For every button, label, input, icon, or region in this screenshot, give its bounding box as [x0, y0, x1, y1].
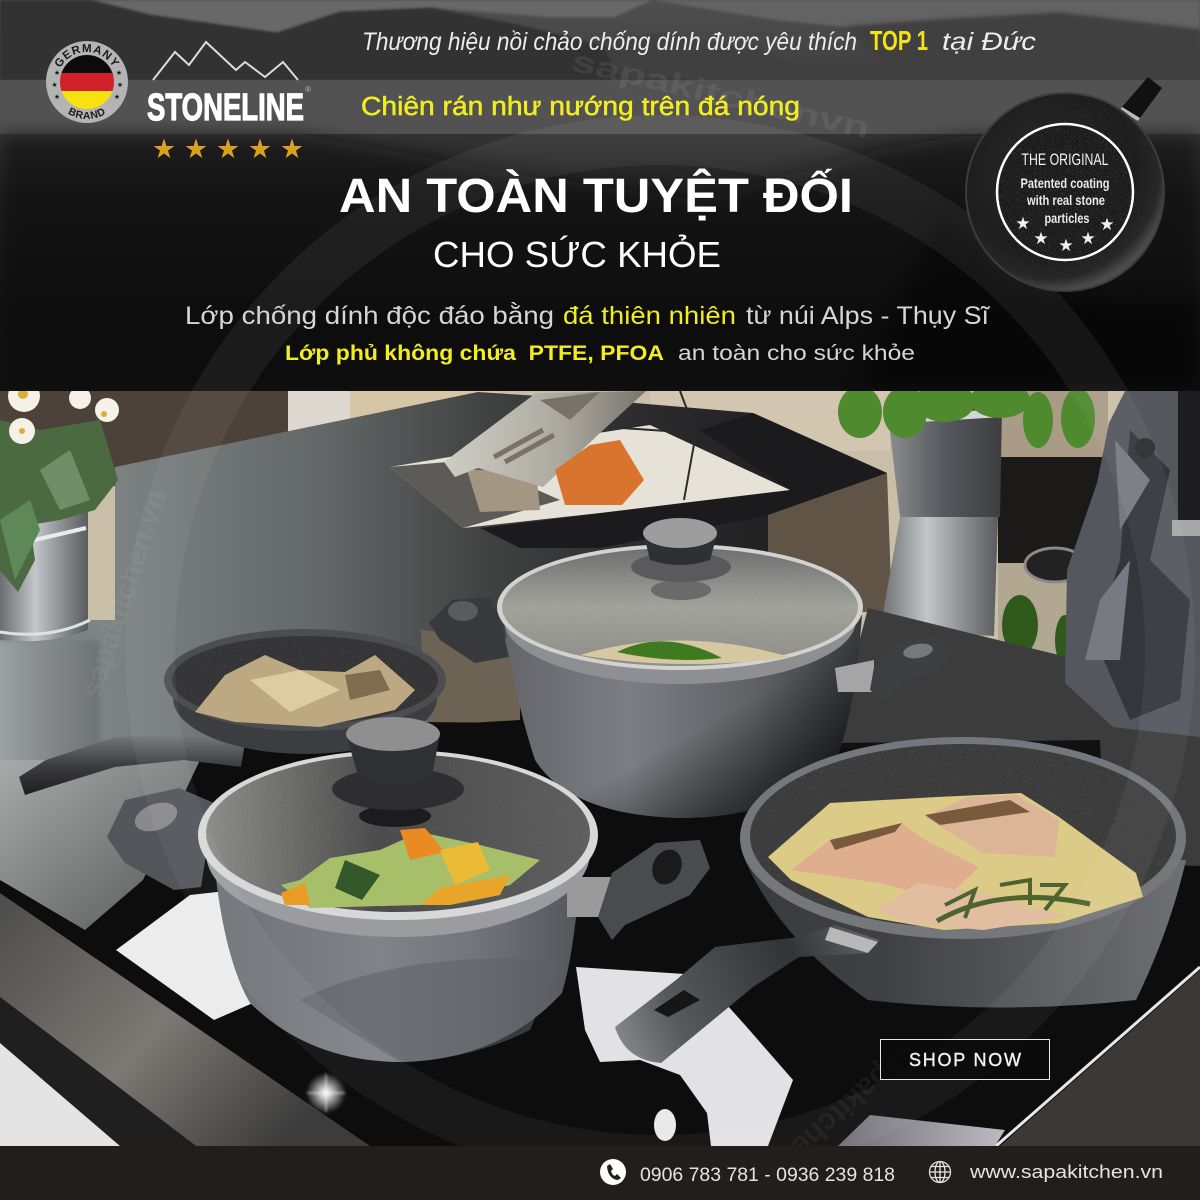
- icon: stone pan: ★: [1058, 236, 1074, 255]
- tagline: top brand in Germany: Thương hiệu nồi chảo chống dính được yêu thích: [362, 28, 857, 56]
- right frying pan: [615, 737, 1186, 1063]
- rear left frying pan: [19, 629, 446, 795]
- badge: Germany brand: ★: [114, 93, 120, 101]
- vegetables: [281, 828, 540, 908]
- rear large pot: [429, 518, 956, 818]
- icon: stone pan: ★: [1080, 229, 1096, 248]
- badge: Germany brand: BRAND: [68, 107, 104, 119]
- kitchen wall: [0, 391, 1125, 654]
- plant and bucket left: [0, 391, 119, 760]
- icon: stone pan: with real stone: [1026, 192, 1105, 208]
- badge: Germany brand: GERMANY: [55, 44, 120, 66]
- contact: website: www.sapakitchen.vn: [969, 1161, 1163, 1182]
- contact: phone numbers: 0906 783 781 - 0936 239 818: [640, 1165, 895, 1186]
- charcoal corner right: [996, 967, 1200, 1146]
- watermark text lower: [601, 1060, 951, 1171]
- footer bar: [0, 1146, 1200, 1200]
- button: shop now: [880, 1040, 1050, 1080]
- badge: Germany brand: ★: [117, 81, 123, 89]
- icon: stone pan: ★: [1033, 229, 1049, 248]
- sparkle: [306, 1073, 346, 1113]
- logo: Stoneline: ®: [305, 85, 311, 94]
- rating stars: ★: [280, 134, 304, 164]
- herb plant and metal bucket right: [838, 382, 1095, 665]
- badge: Germany brand: ★: [116, 69, 122, 77]
- description line 1: [185, 301, 990, 330]
- icon: stone pan: ★: [1015, 214, 1031, 233]
- black cooktop: [188, 720, 520, 784]
- icon: globe: [930, 1162, 950, 1182]
- icon: stone pan: ★: [1099, 215, 1115, 234]
- gray surface left: [0, 760, 200, 930]
- icon: stone pan: particles: [1044, 210, 1090, 226]
- description line 1: Lớp chống dính độc đáo bằng: [185, 301, 554, 330]
- watermark text lower: sapakitchen.vn: [75, 486, 174, 702]
- badge: Germany brand: ★: [51, 81, 58, 89]
- description line 2: [285, 341, 915, 365]
- countertop: [0, 392, 887, 743]
- badge: Germany brand: ★: [54, 69, 60, 77]
- tagline: top brand in Germany: tại Đức: [942, 28, 1037, 56]
- secondary heading: CHO SỨC KHỎE: [433, 233, 721, 275]
- rating stars: [152, 134, 304, 164]
- header panel background: [0, 0, 1200, 391]
- rating stars: ★: [248, 134, 272, 164]
- photo: kitchen scene: [0, 391, 1200, 1146]
- watermark text lower: sapakitchen.vn: [739, 1035, 922, 1200]
- description line 2: an toàn cho sức khỏe: [678, 341, 915, 365]
- logo: Stoneline: [147, 42, 311, 129]
- main heading: AN TOÀN TUYỆT ĐỐI: [339, 168, 853, 223]
- icon: stone pan: Patented coating: [1020, 175, 1110, 191]
- tagline: top brand in Germany: TOP 1: [870, 25, 928, 56]
- stone block: [1065, 391, 1200, 737]
- dark counter reflections: [421, 413, 892, 723]
- badge: Germany brand: [46, 41, 128, 123]
- icon: stone pan: THE ORIGINAL: [1022, 150, 1108, 169]
- front pot with lid: [107, 717, 710, 1062]
- description line 1: đá thiên nhiên: [563, 302, 736, 330]
- watermark text: sapakitchenvn: [568, 45, 873, 145]
- badge: Germany brand: ★: [54, 93, 60, 101]
- rating stars: ★: [184, 134, 208, 164]
- icon: phone: [600, 1159, 626, 1185]
- rating stars: ★: [152, 134, 176, 164]
- watermark ring: [136, 391, 1190, 1146]
- icon: stone pan: [966, 77, 1164, 291]
- right charcoal counter: [833, 608, 1200, 866]
- button: shop now: SHOP NOW: [909, 1050, 1021, 1070]
- salmon in sauce: [768, 793, 1143, 930]
- slicer with carrots: [390, 391, 790, 528]
- charcoal band left: [0, 893, 370, 1146]
- logo: Stoneline: STONELINE: [147, 87, 304, 129]
- description line 2: Lớp phủ không chứa PTFE, PFOA: [285, 341, 664, 365]
- description line 1: từ núi Alps - Thụy Sĩ: [746, 302, 990, 330]
- rating stars: ★: [216, 134, 240, 164]
- white reflections under pots: [116, 890, 1005, 1146]
- subheading: hot stone frying: Chiên rán như nướng trên đá nóng: [361, 93, 800, 121]
